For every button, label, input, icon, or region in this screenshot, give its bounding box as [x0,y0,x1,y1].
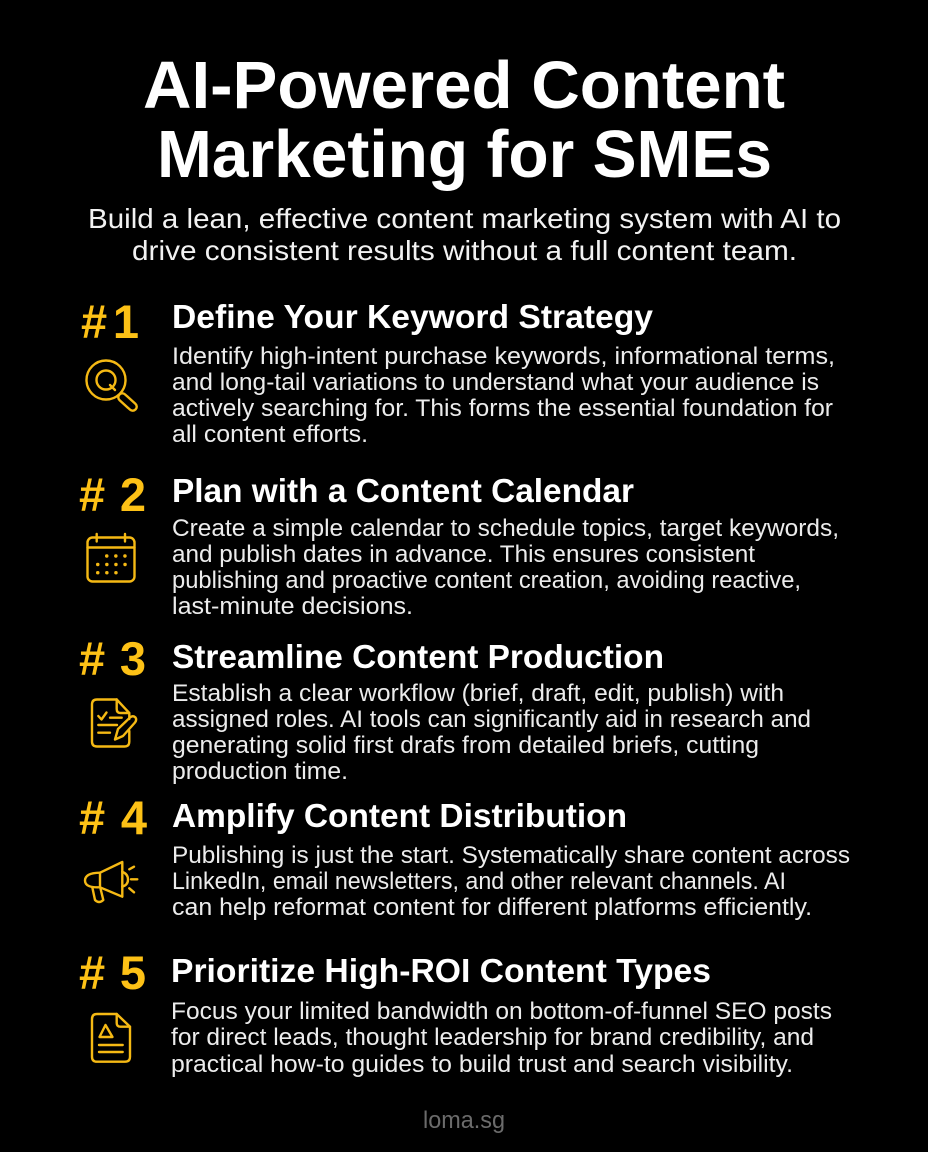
step 2 [79,468,839,620]
icon: calendar [88,534,134,582]
step 2 number: # 2 [79,468,146,521]
icon: magnifying glass [86,360,138,412]
step 5 body: for direct leads, thought leadership for brand credibility, and [171,1024,814,1051]
step 2 body: publishing and proactive content creation, avoiding reactive, [172,567,801,594]
step 5 body [171,998,832,1078]
step 5 body: Focus your limited bandwidth on bottom-of-funnel SEO posts [171,998,832,1025]
step 3 heading: Streamline Content Production [172,638,664,675]
step 3 body: generating solid first drafs from detailed briefs, cutting [172,732,759,759]
step 3 body: assigned roles. AI tools can significantly aid in research and [172,706,811,733]
subtitle [88,203,841,266]
step 1 number: # 1 [81,295,139,348]
step 3 body [172,680,811,785]
icon: document with pencil [92,700,136,746]
step 4 body: Publishing is just the start. Systematically share content across [172,842,850,869]
step 3 number: # 3 [79,632,146,685]
step 2 body: last-minute decisions. [172,593,413,620]
title [143,48,785,192]
step 4 number: # 4 [79,791,147,844]
step 4 body: LinkedIn, email newsletters, and other relevant channels. AI [172,868,786,895]
step 5 heading: Prioritize High-ROI Content Types [171,952,711,989]
step 3 body: production time. [172,758,348,785]
step 3 [79,632,811,785]
title: AI-Powered Content [143,48,785,123]
step 5 body: practical how-to guides to build trust and search visibility. [171,1051,793,1078]
title: Marketing for SMEs [157,117,772,192]
footer: loma.sg: loma.sg [423,1107,505,1134]
step 4 body: can help reformat content for different platforms efficiently. [172,894,812,921]
step 1 body: all content efforts. [172,421,368,448]
step 1 body: and long-tail variations to understand what your audience is [172,369,819,396]
step 4 [79,791,850,921]
step 2 heading: Plan with a Content Calendar [172,472,634,509]
step 4 body [172,842,850,921]
step 3 body: Establish a clear workflow (brief, draft, edit, publish) with [172,680,784,707]
step 5 number: # 5 [79,946,146,999]
step 1 body [172,343,835,448]
icon: megaphone [85,862,137,902]
step 1 body: Identify high-intent purchase keywords, informational terms, [172,343,835,370]
subtitle: drive consistent results without a full content team. [132,235,797,266]
subtitle: Build a lean, effective content marketing system with AI to [88,203,841,234]
icon: document [92,1014,130,1062]
step 2 body [172,515,839,620]
step 1 heading: Define Your Keyword Strategy [172,298,654,335]
step 2 body: Create a simple calendar to schedule topics, target keywords, [172,515,839,542]
step 4 heading: Amplify Content Distribution [172,797,627,834]
step 5 [79,946,832,1078]
step 1 body: actively searching for. This forms the essential foundation for [172,395,833,422]
step 1 [81,295,835,448]
step 2 body: and publish dates in advance. This ensures consistent [172,541,755,568]
